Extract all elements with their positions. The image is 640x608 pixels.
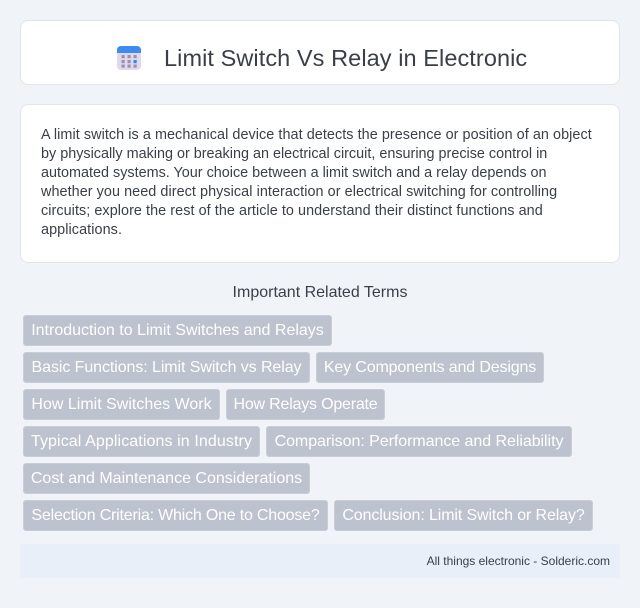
tag <box>23 426 260 457</box>
tag <box>334 500 593 531</box>
tag <box>23 463 310 494</box>
tag: Cost and Maintenance Considerations <box>31 470 302 487</box>
tag <box>23 352 310 383</box>
tag <box>23 500 328 531</box>
text block: intro paragraph: circuits; explore the rest of the article to understand their distinct functions and <box>41 203 543 219</box>
tag: Introduction to Limit Switches and Relays <box>31 322 324 339</box>
tag: Comparison: Performance and Reliability <box>275 433 563 450</box>
tag <box>316 352 544 383</box>
tag: How Limit Switches Work <box>31 396 212 413</box>
text block: intro paragraph: by physically making or breaking an electrical circuit, ensuring precise control in <box>41 146 547 162</box>
tag <box>23 389 220 420</box>
title: Limit Switch Vs Relay in Electronic <box>164 45 527 71</box>
tag group: related terms <box>23 315 593 531</box>
tag: Conclusion: Limit Switch or Relay? <box>342 507 585 524</box>
tag <box>23 315 332 346</box>
text block: intro paragraph: applications. <box>41 222 122 238</box>
text block: intro paragraph <box>41 127 592 238</box>
tag <box>266 426 572 457</box>
panel: intro paragraph card <box>20 104 620 263</box>
tag: Key Components and Designs <box>324 359 536 376</box>
icon: calendar <box>117 46 141 70</box>
text block: intro paragraph: A limit switch is a mechanical device that detects the presence or position of an object <box>41 127 592 143</box>
tag: Selection Criteria: Which One to Choose? <box>31 507 320 524</box>
tag: Typical Applications in Industry <box>31 433 252 450</box>
footer credit: All things electronic - Solderic.com <box>427 554 610 568</box>
panel: header card <box>20 20 620 85</box>
tag: Basic Functions: Limit Switch vs Relay <box>32 359 301 376</box>
tag: How Relays Operate <box>233 396 378 413</box>
tag <box>226 389 385 420</box>
text block: intro paragraph: whether you need direct physical interaction or electrical switching for controlling <box>41 184 557 200</box>
heading: important related terms: Important Related Terms <box>233 284 407 301</box>
text block: intro paragraph: automated systems. Your choice between a limit switch and a relay depends on <box>41 165 547 181</box>
footer bar <box>20 544 620 578</box>
